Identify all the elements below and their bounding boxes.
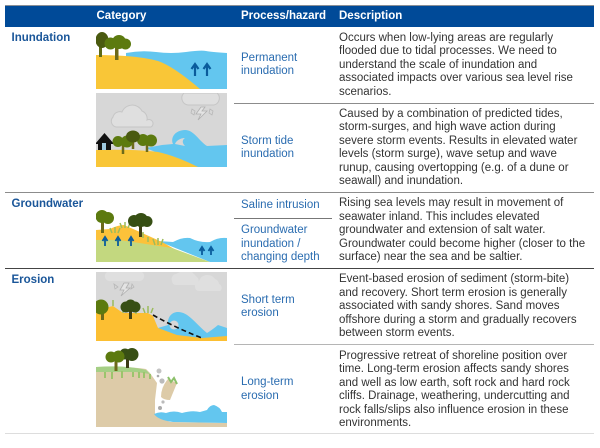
description: groundwater: Groundwater could become higher (closer to the — [339, 238, 585, 250]
description: groundwater: surface) near the sea and be saltier. — [339, 251, 522, 263]
description: permanent inundation: Occurs when low-lying areas are regularly — [339, 32, 553, 44]
process: storm tide inundation: Storm tide — [241, 134, 293, 146]
description: storm tide inundation — [339, 108, 578, 187]
process: permanent inundation: inundation — [241, 65, 294, 77]
process: groundwater inundation — [241, 224, 320, 263]
description: short term erosion: and recovery. Short term erosion is generally — [339, 286, 567, 298]
process: long-term erosion — [241, 376, 293, 402]
description: storm tide inundation: Caused by a combination of predicted tides, — [339, 108, 563, 120]
description: long-term erosion: rock falls/slips also influence erosion in these — [339, 404, 568, 416]
description: storm tide inundation: storm-surges, and high wave action during — [339, 121, 556, 133]
illustration: short term erosion — [96, 272, 227, 341]
description: long-term erosion: and well as low earth, soft rock and hard rock — [339, 376, 570, 388]
process: short term erosion — [241, 294, 295, 319]
description: permanent inundation: scenarios. — [339, 86, 391, 98]
description: long-term erosion: environments. — [339, 417, 411, 429]
process: long-term erosion: Long-term — [241, 376, 293, 388]
category: erosion: Erosion — [12, 274, 54, 286]
description: permanent inundation: associated impacts over various sea level rise — [339, 72, 573, 84]
process: permanent inundation: Permanent — [241, 52, 297, 64]
illustration: permanent inundation — [96, 32, 227, 89]
illustration: storm tide inundation — [96, 93, 227, 167]
illustration: groundwater — [96, 210, 227, 262]
description: storm tide inundation: runup, causing overtopping (e.g. of a dune or — [339, 162, 569, 174]
category: groundwater: Groundwater — [12, 198, 83, 210]
process: long-term erosion: erosion — [241, 390, 279, 402]
description: groundwater: Rising sea levels may result in movement of — [339, 197, 563, 209]
process: storm tide inundation: inundation — [241, 148, 294, 160]
description: storm tide inundation: severe storm events. Results in elevated water — [339, 134, 577, 146]
description: permanent inundation: flooded due to tidal processes. We need to — [339, 45, 557, 57]
description: short term erosion: between storm events. — [339, 327, 455, 339]
process: groundwater inundation: Groundwater — [241, 224, 307, 236]
description: storm tide inundation: levels (storm surge), wave setup and wave — [339, 148, 557, 160]
description: short term erosion: associated with sandy shores. Sand moves — [339, 300, 560, 312]
description: short term erosion: offshore during a storm and gradually recovers — [339, 314, 577, 326]
description: long-term erosion — [339, 350, 570, 429]
process: short term erosion: erosion — [241, 307, 279, 319]
description: storm tide inundation: seawall) and inundation. — [339, 175, 463, 187]
description: groundwater — [339, 197, 585, 263]
illustration: long-term erosion — [96, 348, 227, 427]
description: long-term erosion: cliffs. Drainage, weathering, undercutting and — [339, 390, 570, 402]
column heading: category: Category — [96, 10, 146, 22]
column heading: process/hazard: Process/hazard — [241, 10, 326, 22]
column heading: description: Description — [339, 10, 402, 22]
category: inundation: Inundation — [12, 32, 70, 44]
description: short term erosion — [339, 273, 577, 339]
description: permanent inundation — [339, 32, 573, 98]
process: saline intrusion: Saline intrusion — [241, 199, 320, 211]
process: permanent inundation — [241, 52, 298, 77]
description: long-term erosion: Progressive retreat of shoreline position over — [339, 350, 567, 362]
process: short term erosion: Short term — [241, 294, 295, 306]
process: groundwater inundation: changing depth — [241, 251, 320, 263]
description: groundwater: seawater inland. This includes elevated — [339, 210, 540, 222]
process: groundwater inundation: inundation / — [241, 238, 300, 250]
description: permanent inundation: understand the scale of inundation and — [339, 58, 537, 70]
table header bar — [5, 5, 594, 27]
description: short term erosion: Event-based erosion of sediment (storm-bite) — [339, 273, 569, 285]
process: storm tide inundation — [241, 134, 294, 160]
description: groundwater: groundwater and extension of salt water. — [339, 224, 546, 236]
description: long-term erosion: time. Long-term erosion affects sandy shores — [339, 363, 569, 375]
